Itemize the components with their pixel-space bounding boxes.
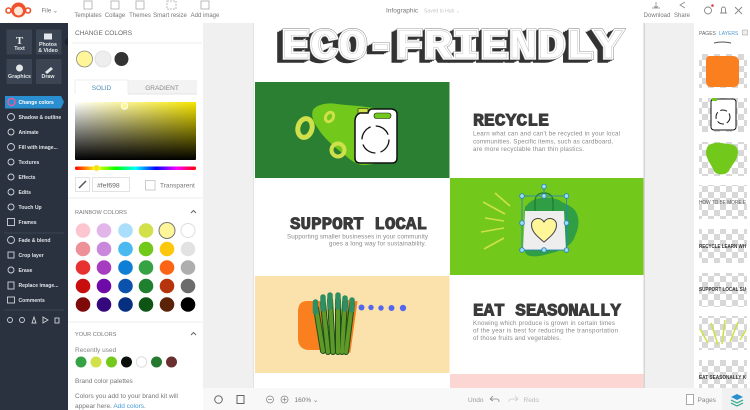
change colors panel <box>68 23 203 410</box>
bottom bar <box>203 388 750 410</box>
rainbow color swatches <box>76 222 195 312</box>
heading: eat seasonally: EAT SEASONALLY <box>473 302 621 322</box>
tabs: pages and layers: PAGES <box>699 31 717 37</box>
help, bell, close <box>704 4 742 14</box>
menu labels <box>18 115 61 304</box>
tool labels: Draw <box>42 74 55 80</box>
layer thumbnail: support local text <box>699 273 747 307</box>
title: ECO-FRIENDLY <box>282 23 623 71</box>
menu labels: Erase <box>18 268 33 274</box>
menu labels: Touch Up <box>18 205 42 211</box>
body: recycle: Learn what can and can't be recycled in your local <box>473 130 620 138</box>
recently used: Recently used <box>75 347 117 354</box>
transparent checkbox: Transparent <box>160 182 195 190</box>
menu labels: Edits <box>18 190 31 196</box>
text block: recycle <box>473 112 620 153</box>
panel: eat seasonally illustration <box>255 276 450 373</box>
tool labels: Graphics <box>8 74 31 80</box>
color picker <box>75 102 196 160</box>
tool labels <box>8 34 59 80</box>
text block: eat seasonally <box>473 302 621 342</box>
heading: support local: SUPPORT LOCAL <box>290 215 427 235</box>
icon: shopping bag with heart <box>523 193 566 250</box>
body: support local: Supporting smaller businesses in your community <box>287 234 429 240</box>
body: eat seasonally <box>473 320 619 342</box>
layer thumbnail: jug <box>699 98 747 132</box>
document name: Saved to Hub ⌄ <box>424 8 460 14</box>
panel: pink section <box>450 374 644 388</box>
layer thumbnail: brush stroke <box>714 42 731 43</box>
file menu: File ⌄ <box>42 8 58 14</box>
menu labels: Animate <box>18 130 39 136</box>
toolbar icons <box>84 1 209 9</box>
icon: sun rays <box>481 193 510 249</box>
body: eat seasonally: Knowing which produce is grown in certain times <box>473 320 615 327</box>
active item: change colors: Change colors <box>18 100 54 106</box>
pages button <box>686 394 717 404</box>
body: support local <box>287 234 429 248</box>
canvas page <box>253 23 645 388</box>
panel heading: CHANGE COLORS <box>75 30 133 37</box>
menu labels: Comments <box>18 298 45 304</box>
tool labels: T <box>16 35 24 47</box>
transparent checkbox <box>146 180 195 190</box>
body: recycle <box>473 130 620 153</box>
menu labels: Fade & blend <box>18 238 50 244</box>
toolbar labels: Templates <box>74 13 102 19</box>
divider: lime strip <box>450 178 644 179</box>
layer thumbnail: recycle text <box>699 229 747 263</box>
layer thumbnail: eat seasonally text <box>699 360 747 388</box>
title: ECO-FRIENDLY <box>276 26 618 74</box>
tool labels: Photos <box>39 42 57 48</box>
download and share: Share <box>674 13 691 19</box>
top toolbar <box>0 0 750 23</box>
zoom controls: 160% ⌄ <box>294 397 318 404</box>
icon: asparagus <box>316 295 358 353</box>
eyedropper and hex field: #fef698 <box>97 182 120 190</box>
icon: orange blob <box>298 301 325 350</box>
zoom controls <box>266 396 318 404</box>
document name <box>386 8 460 14</box>
body: eat seasonally: of those fruits and vegetables. <box>473 335 561 342</box>
heading: recycle: RECYCLE <box>473 112 549 132</box>
document name: Infographic <box>386 8 419 14</box>
download and share: Download <box>644 13 670 19</box>
brand color palettes <box>75 378 179 410</box>
hue slider <box>75 165 196 171</box>
toolbar labels: Smart resize <box>153 13 187 19</box>
undo and redo: Undo <box>468 397 484 404</box>
toolbar labels: Themes <box>129 13 151 19</box>
brand color palettes: appear here. Add colors. <box>75 403 146 410</box>
body: support local: goes a long way for sustainability. <box>329 240 426 248</box>
menu labels: Fill with image... <box>18 145 58 151</box>
tabs: solid and gradient <box>75 80 197 94</box>
layer thumbnail: how to be more <box>699 185 747 219</box>
icon: monkey logo <box>6 2 30 18</box>
eyedropper and hex field <box>76 178 130 192</box>
menu icons <box>8 114 14 303</box>
panel: recycle illustration <box>255 82 450 178</box>
icon: rings <box>296 111 344 156</box>
layers panel <box>694 23 750 388</box>
body: recycle: are more recyclable than thin plastics. <box>473 146 584 153</box>
rainbow colors heading <box>75 210 196 216</box>
body: recycle: communities. Specific items, such as cardboard, <box>473 138 613 145</box>
title: ECO-FRIENDLY <box>280 24 622 72</box>
tool labels: Text <box>14 46 25 52</box>
menu labels: Crop layer <box>18 253 44 259</box>
settings and layout icons <box>215 396 244 404</box>
current color swatches <box>76 51 128 67</box>
recently used <box>75 347 177 368</box>
collapse toggle <box>64 38 72 46</box>
toolbar labels: Collage <box>105 13 126 19</box>
toolbar labels <box>74 13 220 19</box>
your colors heading: YOUR COLORS <box>75 332 117 338</box>
tabs: pages and layers: LAYERS <box>719 31 739 37</box>
title: ECO-FRIENDLY <box>282 23 623 71</box>
tabs: solid and gradient: SOLID <box>92 85 112 92</box>
menu labels: Frames <box>18 220 37 226</box>
tabs: pages and layers <box>699 30 748 37</box>
icon: blue dots <box>358 304 406 311</box>
layer thumbnail: how to be more: HOW TO BE MORE E <box>699 200 747 206</box>
download and share <box>644 2 691 19</box>
panel: support local illustration <box>450 179 644 275</box>
brand color palettes: Colors you add to your brand kit will <box>75 393 179 400</box>
title: ECO-FRIENDLY <box>282 23 623 71</box>
toolbar labels: Add image <box>191 13 220 19</box>
menu labels: Textures <box>18 160 40 166</box>
menu labels: Effects <box>18 175 36 181</box>
undo and redo: Redo <box>524 397 539 404</box>
left tool sidebar <box>0 23 72 410</box>
icon: recycling jug <box>355 108 397 163</box>
selection box <box>520 184 569 252</box>
tabs: solid and gradient: GRADIENT <box>145 85 179 92</box>
title: ECO-FRIENDLY <box>278 25 620 73</box>
dividers and history actions <box>4 233 64 323</box>
layer thumbnail: orange blob <box>699 54 747 88</box>
icon: layers <box>722 388 750 410</box>
icon: green blob <box>524 198 578 256</box>
layer thumbnail: green blob <box>699 142 747 176</box>
your colors heading <box>75 332 196 338</box>
layer thumbnail: rays <box>699 316 747 350</box>
menu labels: Replace image... <box>18 283 59 289</box>
menu labels: Shadow & outline <box>18 115 61 121</box>
tool labels: & Video <box>38 48 59 54</box>
undo and redo <box>468 396 539 404</box>
text block: support local <box>287 215 429 248</box>
tool tiles <box>6 30 62 84</box>
rainbow colors heading: RAINBOW COLORS <box>75 210 127 216</box>
body: eat seasonally: of the year is best for reducing the transportation <box>473 328 619 334</box>
brand color palettes: Brand color palettes <box>75 378 134 385</box>
active item: change colors <box>5 96 64 108</box>
pages button: Pages <box>698 397 717 404</box>
